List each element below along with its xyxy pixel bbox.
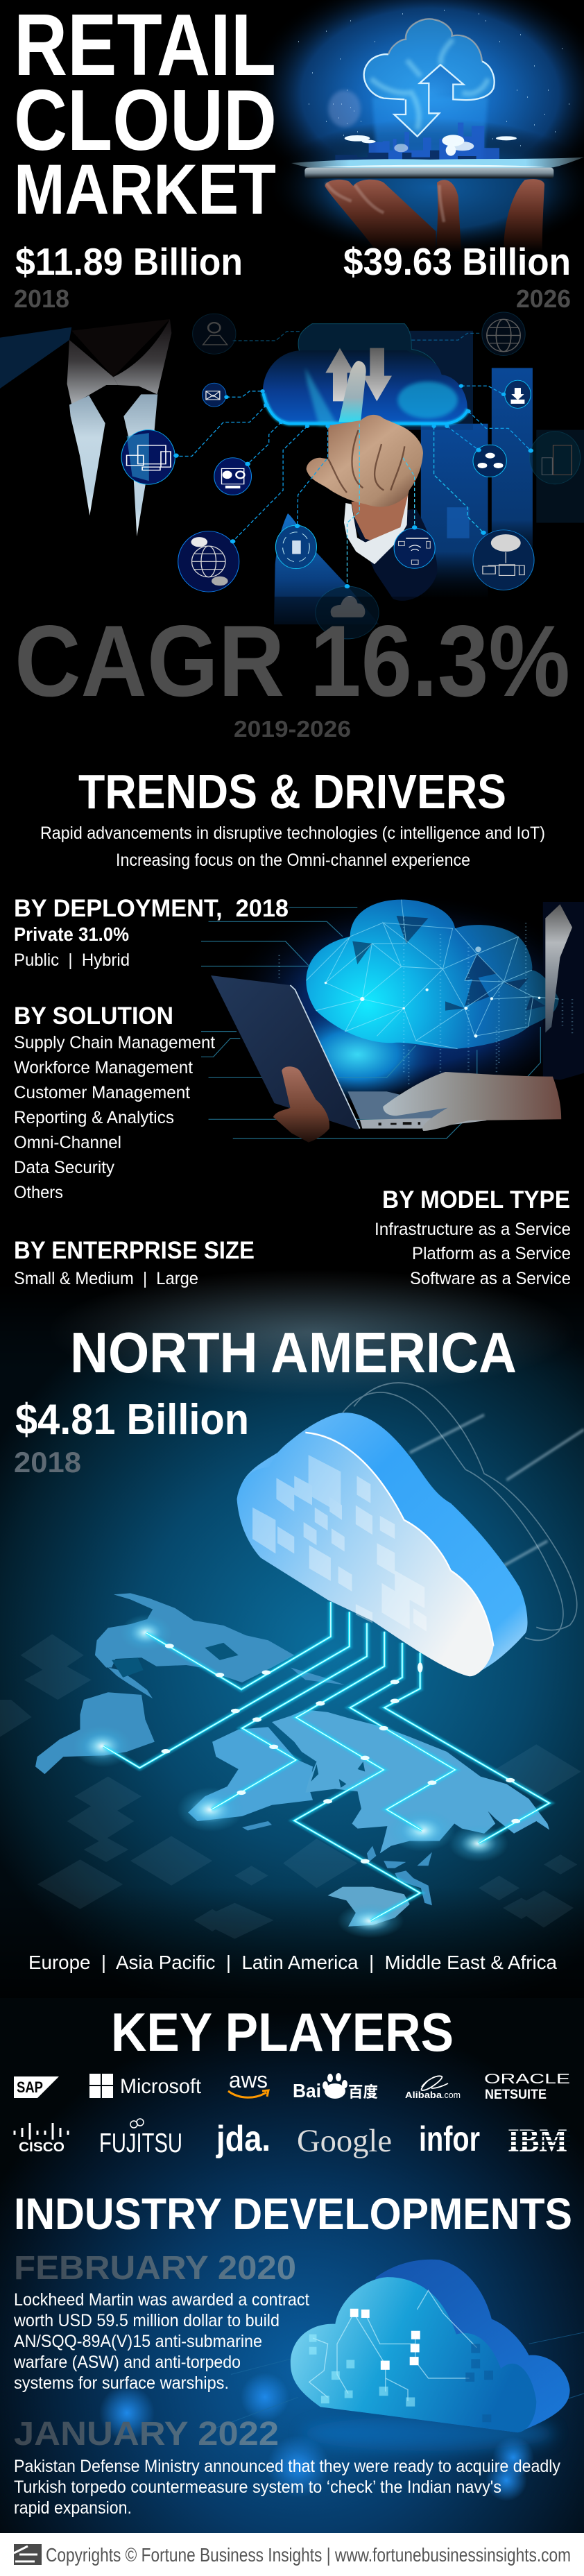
cloud parts [237,1383,584,1676]
left collar [67,340,118,404]
dim nodes [465,2344,493,2422]
footer band [0,2533,584,2576]
solution item: Omni-Channel [14,1133,121,1152]
logo: infor: infor [419,2119,480,2158]
logo: SAP [14,2076,59,2098]
nebula [328,90,361,127]
logo: Cisco: CISCO [19,2140,65,2155]
body: Turkish torpedo countermeasure system to ‘check’ the Indian navy's [14,2477,501,2497]
data rain [280,916,572,1096]
finger glow [305,368,338,425]
leading share: Private 31.0% [14,923,129,945]
trends and drivers [40,765,545,870]
heading: BY ENTERPRISE SIZE [14,1237,255,1264]
photo: laptop with data cloud [201,893,584,1143]
logo: Cisco [15,2123,68,2155]
cloud [263,350,467,424]
developments background [0,1998,584,2533]
skyline front [335,151,522,163]
heading: BY DEPLOYMENT, 2018 [14,895,289,922]
body: systems for surface warships. [14,2373,229,2393]
hologram parts [291,19,584,252]
logo: Fujitsu [99,2119,182,2158]
shirt sliver [545,904,572,1032]
body: AN/SQQ-89A(V)15 anti-submarine [14,2332,262,2351]
logo: Microsoft [89,2074,202,2098]
logo row two [15,2119,570,2159]
options: Small & Medium | Large [14,1269,198,1288]
map and traces [0,1593,581,1939]
cloud rim [263,393,468,424]
title line: market: MARKET [14,150,276,229]
light streaks [410,1415,584,1567]
logo: Baidu: 百度 [348,2083,378,2101]
left shirt panel [69,395,105,515]
year: 2018 [14,1446,81,1478]
cloud outline faint [388,19,482,61]
network icons [121,312,581,639]
dark facets [352,916,545,1011]
cagr period: 2019-2026 [234,716,351,742]
icon: devices [121,430,175,484]
phone [304,168,553,178]
streak core [319,165,546,167]
dashed connectors [176,332,531,586]
small clouds [345,135,517,156]
icon: download [505,380,531,408]
ghost cloud outlines [343,1383,577,1640]
cloud outline bright [364,54,495,137]
floor lines [216,2332,584,2428]
logo: IBM: IBM [508,2122,567,2159]
star nodes [325,946,540,1038]
body [14,2457,560,2518]
brand logo [14,2544,42,2565]
logo: Baidu: Bai [293,2080,321,2101]
value: $4.81 Billion [15,1396,249,1444]
map inlets [112,1643,365,1788]
logo: Google: Google [297,2123,392,2159]
key players heading: KEY PLAYERS [111,2002,454,2063]
bright nodes [350,2309,420,2370]
options: Public | Hybrid [14,950,130,970]
date: JANUARY 2022 [14,2416,279,2453]
value: $39.63 Billion [343,240,571,283]
cuff [344,495,408,564]
suit and shirt [0,319,171,536]
by model type [375,1186,571,1288]
cloud back [239,1413,528,1676]
icon: dim gray cloud [316,586,379,639]
driver one: Rapid advancements in disruptive technologies (c intelligence and IoT) [40,824,545,843]
network overlay [121,312,581,639]
icon: globe and clouds [178,531,239,592]
floor tiles [0,1634,581,1939]
forearm [352,495,408,541]
solution item: Reporting & Analytics [14,1108,174,1127]
logo: Oracle NetSuite: ORACLE [484,2072,570,2087]
index finger [338,361,366,422]
logo: Alibaba.com [405,2076,461,2100]
circuit cloud illustration [216,2260,584,2450]
by solution [14,1003,215,1202]
solution item: Workforce Management [14,1058,193,1077]
light streak [291,157,584,168]
solution item: Customer Management [14,1083,190,1102]
title line: cloud: CLOUD [14,73,277,169]
logo: Alibaba.com: .com [442,2090,461,2100]
up arrow [325,348,354,401]
icon: dim server panel [530,432,581,484]
fade under the photo [0,597,584,638]
by enterprise size [14,1237,255,1288]
knuckle creases [328,430,404,493]
fingers [325,179,544,252]
data cloud [306,900,559,1049]
teal nodes [309,2335,415,2407]
body [13,2290,309,2393]
jacket highlight [0,327,71,389]
cloud [364,19,495,137]
region background [0,1270,584,2019]
down arrow [363,348,392,401]
logo row one [14,2067,570,2102]
glowing circuit traces [103,1602,549,1921]
continents [35,1593,549,1927]
cloud and hand [263,324,468,624]
stars [298,10,569,146]
icon: wifi devices [394,528,435,568]
data tiles [252,1455,427,1631]
laptop front [360,1117,487,1129]
blue glow [246,0,584,215]
logo: Baidu [293,2073,378,2101]
regional heading: NORTH AMERICA [70,1320,517,1385]
logo: aws: aws [229,2067,268,2092]
solution item: Data Security [14,1158,114,1177]
model item: Platform as a Service [412,1244,571,1263]
isometric cloud [237,1413,528,1676]
logo: Alibaba.com: Alibaba [405,2090,443,2100]
light columns [372,97,488,162]
icon: dim globe [482,312,525,355]
solution item: Supply Chain Management [14,1033,215,1052]
body: rapid expansion. [14,2498,132,2518]
teal glow in cloud [397,382,458,418]
body: Lockheed Martin was awarded a contract [14,2290,309,2310]
cloud rim glow [263,393,468,424]
lid edge [290,985,360,1129]
right hand [383,1072,561,1131]
date: FEBRUARY 2020 [14,2250,296,2287]
icon: gears monitor [214,458,251,495]
logo: Fujitsu: FUJITSU [99,2129,182,2158]
other regions: Europe | Asia Pacific | Latin America | Middle East & Africa [28,1952,557,1973]
model item: Infrastructure as a Service [375,1220,571,1239]
body: worth USD 59.5 million dollar to build [13,2311,280,2330]
footer [0,2533,584,2576]
icon: three clouds [473,445,506,477]
connector nodes [173,384,533,588]
skyline [369,123,499,162]
logo: SAP: SAP [17,2079,43,2096]
fist [307,415,423,507]
heading: BY SOLUTION [14,1003,173,1030]
development: january 2022 [14,2416,560,2518]
logo: jda: jda. [216,2119,270,2159]
isometric world map with cloud [0,1383,584,1939]
glow under cloud [277,1006,438,1103]
cloud front [291,2277,536,2432]
cloud mesh [306,900,559,1049]
laptop lid [211,975,360,1129]
model item: Software as a Service [410,1269,571,1288]
logo: Oracle NetSuite [484,2072,570,2102]
left hand [273,1066,329,1143]
cloud edge highlight [305,1433,494,1646]
keyboard [347,1091,477,1119]
body: warfare (ASW) and anti-torpedo [13,2353,241,2372]
title [14,0,277,229]
market value 2018 [14,240,243,313]
logo: Oracle NetSuite: NETSUITE [485,2088,547,2102]
glow [218,893,584,1115]
circuit lines [201,907,540,1138]
neck shadow [71,319,170,377]
right collar [113,319,171,394]
right shirt panel [123,394,157,536]
glow spots [73,1614,508,1938]
by deployment [14,895,289,970]
cloud front [237,1433,494,1676]
year: 2018 [14,284,69,313]
year: 2026 [516,284,571,313]
photo: businessman touching cloud network [0,312,584,639]
icon: binary cloud [473,530,534,590]
dark forearm sleeve [352,509,437,601]
sleeve [274,513,379,624]
lower glow [267,118,584,257]
circuit lines [309,2290,476,2401]
ports [379,1122,420,1125]
heading: BY MODEL TYPE [382,1186,570,1213]
icon: dim gears [193,314,236,354]
regional value [14,1396,249,1478]
value: $11.89 Billion [15,240,243,283]
hero illustration: hologram cloud over phone [246,0,584,257]
cloud back [320,2260,570,2432]
development: february 2020 [13,2250,309,2393]
suit right [543,902,584,1080]
ghost cloud top [298,324,439,375]
ground glow [302,2416,555,2450]
solution item: Others [14,1183,63,1202]
trace beads [162,1644,520,1863]
icon: envelope [203,383,226,407]
market value 2026 [343,240,571,313]
driver two: Increasing focus on the Omni-channel experience [116,851,470,870]
heading: TRENDS & DRIVERS [78,765,506,819]
blue background [387,331,584,606]
logo: Microsoft: Microsoft [120,2075,202,2098]
icon: server ring [275,525,316,569]
cloud core [371,40,488,130]
